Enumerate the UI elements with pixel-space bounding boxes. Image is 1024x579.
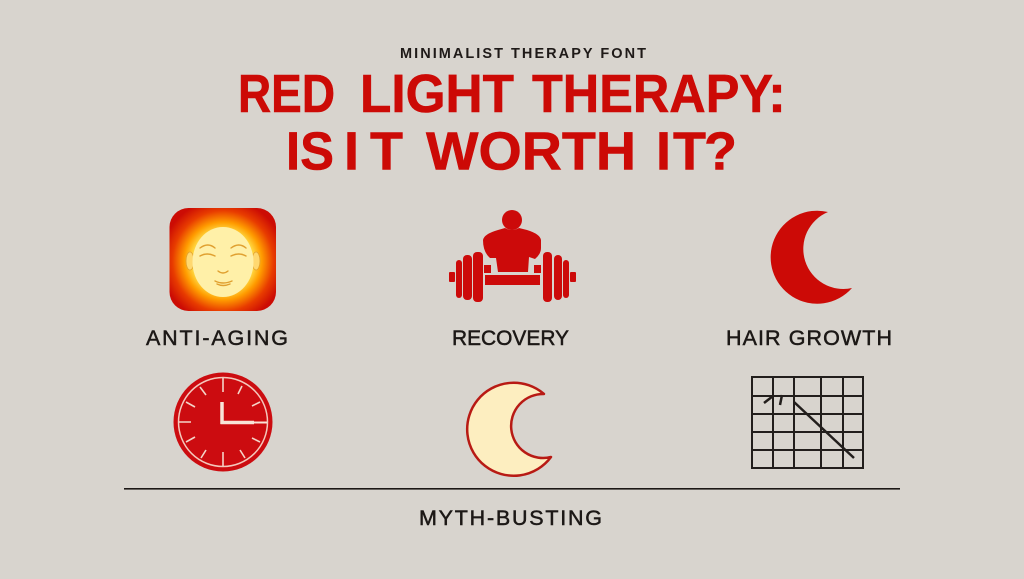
label: myth-busting: MYTH-BUSTING [419, 506, 602, 530]
icon: red crescent moon [771, 211, 852, 304]
title: ? [704, 122, 737, 182]
icon: clock [174, 372, 272, 472]
title: T [370, 122, 403, 182]
title: WORTH [426, 122, 636, 182]
title [238, 64, 786, 182]
label: hair growth: HAIR GROWTH [726, 326, 892, 350]
title: I [344, 122, 359, 182]
title: I [656, 122, 671, 182]
icon: cream crescent moon [467, 383, 551, 476]
subtitle: MINIMALIST THERAPY FONT [400, 46, 646, 62]
divider line [124, 488, 900, 490]
label: recovery: RECOVERY [452, 326, 569, 350]
title: IS [286, 122, 334, 182]
label: anti-aging: ANTI-AGING [146, 326, 288, 350]
icon: grid chart with declining line [752, 376, 863, 469]
icon: weightlifter with barbell [449, 210, 576, 302]
title: RED [238, 64, 335, 124]
title: T [673, 122, 706, 182]
title: THERAPY [532, 64, 773, 124]
title: : [768, 64, 786, 124]
title: LIGHT [360, 64, 514, 124]
icon: glowing face [170, 208, 276, 311]
